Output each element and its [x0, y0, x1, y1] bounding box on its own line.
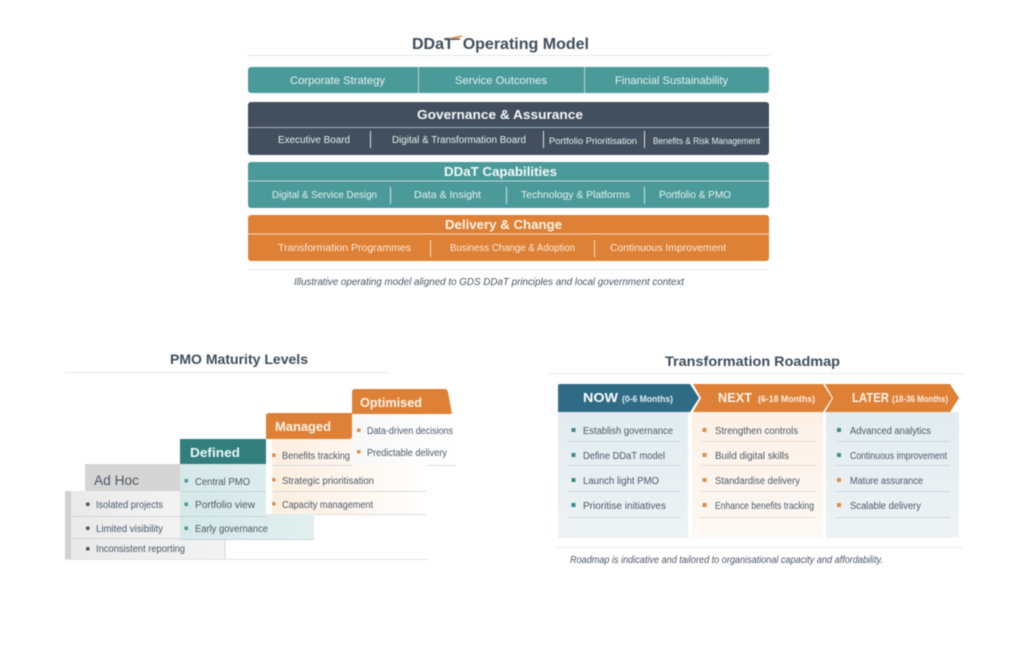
column: NEXT: NEXT	[718, 390, 752, 405]
band: delivery and change: Continuous Improvement	[610, 242, 726, 254]
step: Optimised	[352, 389, 456, 466]
band: DDaT capabilities: Portfolio & PMO	[659, 189, 731, 201]
band: strategic drivers	[248, 67, 769, 93]
panel: transformation roadmap	[548, 353, 965, 566]
step: Managed: Capacity management	[282, 500, 373, 511]
column: NEXT	[692, 384, 832, 538]
step: Ad Hoc	[65, 464, 428, 560]
step: Defined: Defined	[190, 445, 240, 460]
icon: orange stroke over title	[445, 36, 462, 40]
band: delivery and change	[248, 215, 769, 261]
step: Defined	[180, 439, 314, 540]
band: DDaT capabilities: DDaT Capabilities	[444, 164, 557, 179]
step: Optimised: Optimised	[360, 395, 422, 410]
column: NOW	[558, 384, 699, 538]
column: NOW: (0-6 Months)	[622, 394, 673, 404]
column: NOW: Define DDaT model	[583, 451, 665, 462]
column: NOW: Establish governance	[583, 426, 673, 437]
step: Defined: Portfolio view	[195, 500, 256, 511]
caption: operating model note: Illustrative operating model aligned to GDS DDaT principles and local government context	[294, 277, 685, 288]
column: LATER: LATER	[852, 390, 890, 405]
band: DDaT capabilities: Data & Insight	[414, 189, 481, 201]
step: Ad Hoc: Inconsistent reporting	[96, 544, 185, 555]
step: Managed: Strategic prioritisation	[282, 476, 374, 487]
band: governance and assurance: Digital & Transformation Board	[392, 135, 526, 146]
step: Defined: Early governance	[195, 524, 268, 535]
band: strategic drivers: Corporate Strategy	[290, 75, 386, 87]
column: NEXT: Build digital skills	[715, 451, 789, 462]
column: NOW: Launch light PMO	[583, 476, 659, 487]
step: Defined: Central PMO	[195, 477, 250, 488]
step: Ad Hoc: Isolated projects	[96, 500, 163, 511]
band: DDaT capabilities: Digital & Service Design	[272, 189, 377, 201]
column: NOW: Prioritise initiatives	[583, 501, 666, 512]
panel: PMO maturity levels	[64, 351, 456, 560]
step: Managed	[266, 413, 427, 514]
band: strategic drivers: Service Outcomes	[455, 75, 548, 87]
caption: roadmap note: Roadmap is indicative and tailored to organisational capacity and affordability.	[570, 555, 883, 566]
band: delivery and change: Business Change & Adoption	[450, 242, 575, 254]
band: governance and assurance: Portfolio Prioritisation	[549, 136, 637, 146]
band: governance and assurance: Executive Board	[278, 135, 350, 146]
band: strategic drivers: Financial Sustainability	[615, 75, 729, 87]
column: LATER: Mature assurance	[850, 476, 923, 487]
band: governance and assurance: Governance & Assurance	[417, 107, 583, 122]
column: LATER: Scalable delivery	[850, 501, 921, 512]
column: NEXT: Standardise delivery	[715, 476, 800, 487]
step: Optimised: Predictable delivery	[367, 448, 447, 459]
column: LATER: (18-36 Months)	[892, 394, 948, 404]
band: DDaT capabilities	[248, 162, 769, 208]
band: governance and assurance	[248, 102, 769, 155]
column: LATER: Continuous improvement	[850, 451, 947, 462]
column: NEXT: Enhance benefits tracking	[715, 501, 814, 512]
column: NOW: NOW	[583, 390, 619, 405]
step: Managed: Managed	[275, 419, 331, 434]
band: delivery and change: Delivery & Change	[445, 217, 562, 232]
column: NEXT: (6-18 Months)	[758, 394, 815, 404]
column: NEXT: Strengthen controls	[715, 426, 798, 437]
column: LATER	[825, 384, 959, 538]
column: LATER: Advanced analytics	[850, 426, 931, 437]
step: Ad Hoc: Limited visibility	[96, 524, 163, 535]
band: delivery and change: Transformation Programmes	[278, 242, 411, 254]
panel: DDaT operating model	[247, 36, 770, 288]
band: governance and assurance: Benefits & Risk Management	[653, 136, 760, 146]
step: Optimised: Data-driven decisions	[367, 426, 453, 437]
band: DDaT capabilities: Technology & Platforms	[521, 189, 630, 201]
heading: Transformation Roadmap: Transformation Roadmap	[665, 353, 840, 369]
heading: PMO Maturity Levels: PMO Maturity Levels	[170, 351, 308, 367]
title: DDaT Operating Model: DDaT Operating Model	[412, 36, 589, 53]
step: Managed: Benefits tracking	[282, 451, 350, 462]
step: Ad Hoc: Ad Hoc	[94, 472, 139, 488]
